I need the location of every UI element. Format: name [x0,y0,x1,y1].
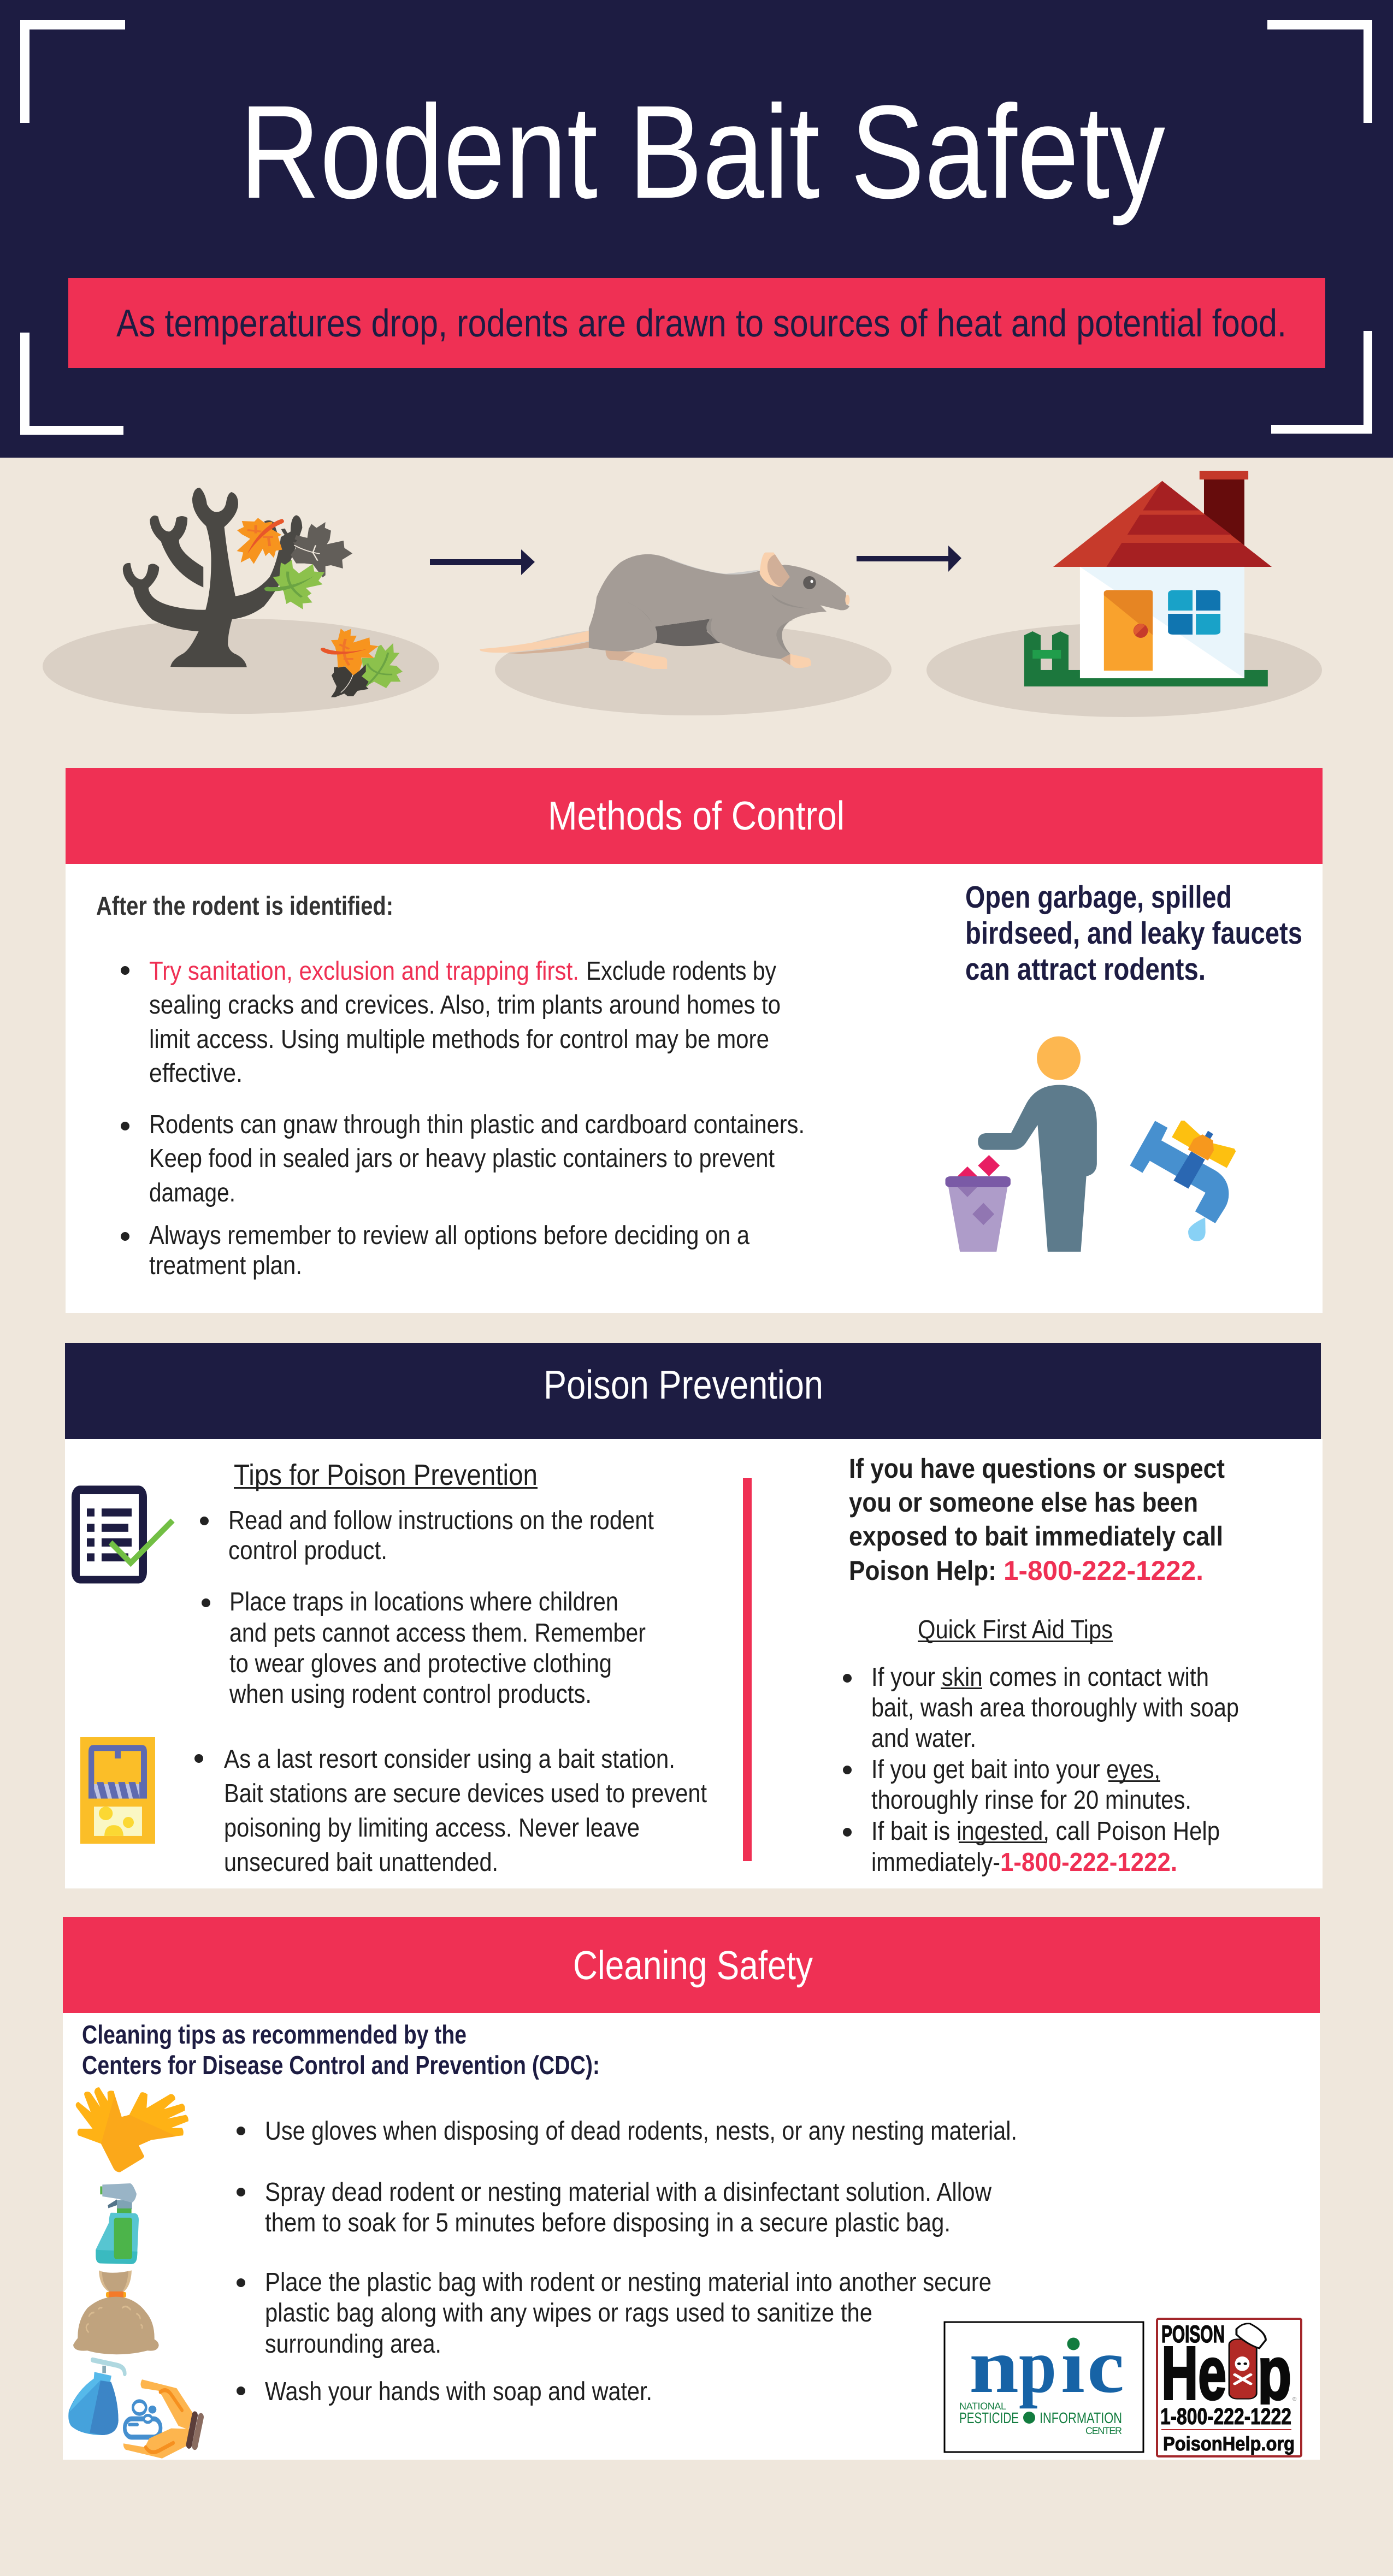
arrow: rat to house [857,546,961,572]
subheading: CDC recommendation [82,2021,600,2080]
heading band: cleaning safety [63,1917,1320,2013]
roof [1053,481,1272,567]
bullet list: cleaning steps: them to soak for 5 minutes before disposing in a secure plastic bag. [265,2208,951,2237]
panel: methods of control [66,768,1323,1313]
corner bracket bottom right [1271,331,1372,434]
bullet list: methods: Exclude rodents by [586,957,776,986]
panel: poison prevention [65,1343,1323,1888]
bullet: bait station: Bait stations are secure devices used to prevent [224,1779,707,1808]
house wall [1080,567,1244,678]
bullet list: first aid: If your skin comes in contact with [871,1663,1209,1692]
bullet list: cleaning steps [237,2117,1017,2406]
logo: NPIC: PESTICIDE [959,2409,1019,2426]
icon: checklist [72,1485,175,1583]
title: Rodent Bait Safety [240,78,1165,226]
bullet list: cleaning steps: Spray dead rodent or nesting material with a disinfectant solution. Allow [265,2178,991,2207]
illustration: rat [480,553,892,715]
bullet list: methods: damage. [149,1179,235,1207]
bullet list: tips: to wear gloves and protective clothing [229,1649,612,1678]
bullet list: methods: Keep food in sealed jars or heavy plastic containers to prevent [149,1144,775,1173]
subheading: After the rodent is identified: [96,892,393,921]
logo: NPIC [945,2322,1143,2452]
bullet list: first aid: If you get bait into your eyes, [871,1755,1160,1784]
logo: NPIC: ı [1061,2323,1085,2409]
bullet list: first aid: bait, wash area thoroughly with soap [871,1693,1239,1722]
subheading: first aid: Quick First Aid Tips [918,1615,1113,1644]
bullet list: first aid: and water. [871,1724,976,1753]
subheading: CDC recommendation: Cleaning tips as recommended by the [82,2021,467,2050]
logo: NPIC: c [1087,2323,1124,2409]
bullet list: tips: Read and follow instructions on the rodent [228,1506,654,1535]
leaf: green on branch [264,560,324,609]
door [1104,590,1153,671]
callout: attractants [965,880,1302,987]
corner bracket bottom left [20,333,123,435]
logo: NPIC: INFORMATION [1040,2409,1122,2426]
corner bracket top left [20,20,125,123]
rat body [589,554,849,659]
bullet list: first aid [843,1663,1239,1877]
icon: spray bottle [96,2183,139,2264]
person [978,1037,1097,1252]
leaf: orange on branch [237,518,284,564]
callout: attractants: birdseed, and leaky faucets [965,916,1302,951]
logo: NPIC: NATIONAL [959,2401,1006,2412]
bullet list: cleaning steps: Use gloves when disposing of dead rodents, nests, or any nesting material. [265,2117,1017,2146]
leaf: grey [283,522,352,577]
logo: Poison Help: He [1161,2331,1226,2415]
bullet list: tips: control product. [228,1536,387,1565]
bullet: bait station [194,1745,707,1877]
heading band: poison prevention [65,1343,1321,1439]
fence and ground [1024,631,1268,686]
callout: call poison help [849,1453,1225,1586]
icons: cleaning supplies [68,2087,201,2459]
callout: call poison help: Poison Help: [849,1555,996,1586]
bullet list: cleaning steps: surrounding area. [265,2330,441,2359]
subtitle band [68,278,1325,368]
bullet list: methods: Rodents can gnaw through thin plastic and cardboard containers. [149,1110,805,1139]
callout: call poison help: If you have questions or suspect [849,1453,1225,1484]
logo: NPIC: CENTER [1085,2425,1122,2436]
icon: gloves [76,2087,188,2172]
bullet list: tips: Place traps in locations where children [229,1588,618,1616]
trash bin [946,1155,1011,1252]
bullet list: methods: effective. [149,1059,243,1088]
logo: Poison Help [1157,2319,1301,2456]
heading band: methods of control [66,768,1323,864]
panel: cleaning safety [63,1917,1320,2460]
logo: Poison Help: PoisonHelp.org [1163,2432,1295,2455]
subheading: CDC recommendation: Centers for Disease Control and Prevention (CDC): [82,2051,600,2080]
illustration: house [926,471,1322,717]
bullet list: methods: treatment plan. [149,1251,302,1280]
bullet list: cleaning steps: Place the plastic bag with rodent or nesting material into another secure [265,2268,991,2297]
logo: NPIC: p [1019,2323,1056,2409]
callout: call poison help: you or someone else has been [849,1487,1198,1518]
icon: bait station [80,1737,155,1844]
subheading: tips: Tips for Poison Prevention [234,1459,538,1491]
bullet list: methods: Always remember to review all options before deciding on a [149,1221,749,1250]
chimney [1200,471,1248,546]
icon: tied bag [73,2270,159,2354]
icon: soap dispenser, soap and washing hands [68,2360,201,2459]
bullet list: first aid: immediately- [871,1848,1000,1877]
leaky faucet [1130,1121,1236,1241]
bullet list: tips: when using rodent control products. [229,1680,592,1709]
bullet list: tips: and pets cannot access them. Remember [229,1619,646,1648]
header banner [0,0,1393,458]
bullet list: methods: Try sanitation, exclusion and trapping first. [149,957,579,986]
logo: NPIC: n [969,2323,1019,2409]
bullet: bait station: unsecured bait unattended. [224,1848,498,1877]
bullet list: tips [200,1506,654,1709]
logo: Poison Help: POISON [1161,2321,1225,2348]
callout: attractants: can attract rodents. [965,952,1206,987]
bullet list: methods: limit access. Using multiple methods for control may be more [149,1025,769,1054]
callout: attractants: Open garbage, spilled [965,880,1232,915]
bullet list: first aid: If bait is ingested, call Poison Help [871,1817,1220,1846]
bullet list: methods [121,957,805,1280]
logo: Poison Help: l [1229,2331,1256,2415]
callout: call poison help: 1-800-222-1222. [1004,1555,1203,1586]
arrow: tree to rat [430,549,535,575]
logo: Poison Help: 1-800-222-1222 [1160,2403,1291,2429]
rat legs [605,650,811,669]
rat ear [760,553,790,587]
heading band: poison prevention: Poison Prevention [544,1362,823,1407]
leaves on ground [321,629,403,697]
corner bracket top right [1267,20,1372,123]
rat eye [803,576,816,589]
rat tail [480,631,589,654]
bullet: bait station: As a last resort consider using a bait station. [224,1745,675,1774]
bullet: bait station: poisoning by limiting access. Never leave [224,1814,640,1843]
bullet list: first aid: thoroughly rinse for 20 minutes. [871,1786,1191,1815]
bullet list: cleaning steps: Wash your hands with soap and water. [265,2377,652,2406]
window [1168,590,1220,635]
heading band: cleaning safety: Cleaning Safety [573,1943,813,1988]
logo: Poison Help: p [1258,2331,1291,2415]
heading band: methods of control: Methods of Control [548,793,845,838]
callout: call poison help: exposed to bait immediately call [849,1521,1223,1551]
bullet list: first aid: 1-800-222-1222. [1000,1848,1177,1877]
icon: person with trash bin and leaky faucet [946,1037,1236,1252]
logo: Poison Help: ® [1292,2396,1297,2402]
illustration: bare tree with fallen leaves [43,488,439,714]
bullet list: methods: sealing cracks and crevices. Also, trim plants around homes to [149,991,781,1020]
bullet list: cleaning steps: plastic bag along with any wipes or rags used to sanitize the [265,2299,872,2328]
vertical divider [743,1478,752,1861]
